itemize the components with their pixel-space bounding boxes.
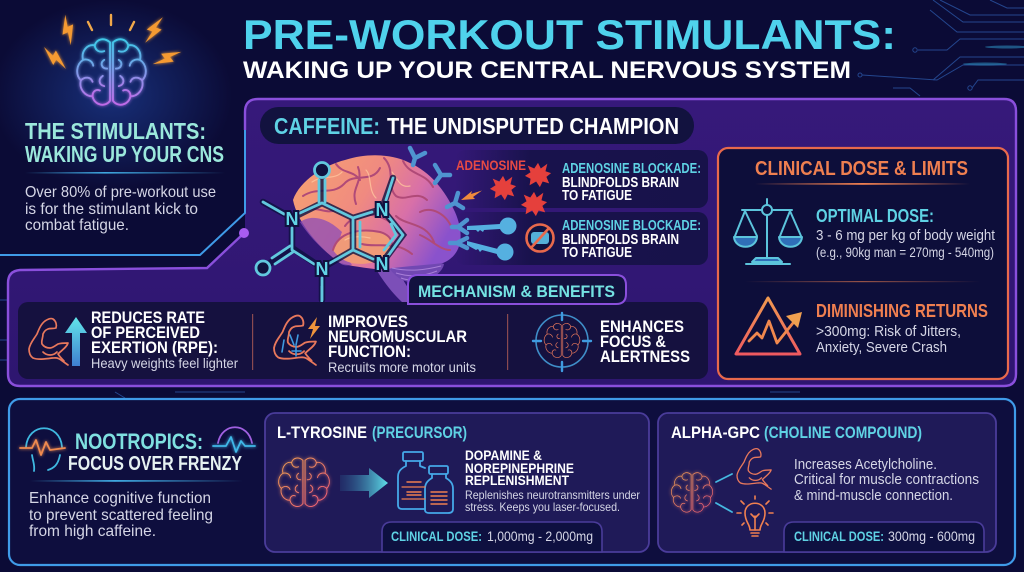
illustration: receptors <box>410 148 467 248</box>
benefit: neuromuscular: Recruits more motor units <box>328 359 476 375</box>
text: adenosine blockade two: BLINDFOLDS BRAIN <box>562 232 679 248</box>
icon: balance scale <box>734 199 802 264</box>
benefit: reduces RPE <box>29 309 238 371</box>
caffeine heading pill: CAFFEINE: <box>274 113 380 139</box>
text: optimal dose <box>816 206 995 260</box>
text: adenosine blockade two <box>562 218 701 261</box>
icon: supplement bottles <box>398 452 453 513</box>
illustration: keys <box>467 218 516 260</box>
connector lines <box>716 474 732 512</box>
nootropics text: FOCUS OVER FRENZY <box>68 453 243 475</box>
benefit: neuromuscular <box>274 313 476 375</box>
molecule stem over benefit panel <box>320 286 323 302</box>
benefit: reduces RPE: OF PERCEIVED <box>91 324 200 342</box>
benefit: reduces RPE: REDUCES RATE <box>91 309 205 327</box>
icon: pulse arc <box>213 427 255 452</box>
benefit: focus: FOCUS & <box>600 333 666 351</box>
illustration: caffeine molecule: N <box>376 254 388 274</box>
adenosine label: ADENOSINE <box>456 158 526 173</box>
illustration: caffeine molecule: N <box>316 259 328 279</box>
card: L-Tyrosine <box>265 413 649 552</box>
left intro block: WAKING UP YOUR CNS <box>25 141 224 167</box>
illustration: caffeine molecule <box>256 162 403 300</box>
clinical dose pill <box>382 522 602 552</box>
title <box>243 11 896 84</box>
benefit: focus <box>533 313 690 371</box>
text: dopamine: REPLENISHMENT <box>465 472 569 488</box>
circuit glow streaks <box>963 46 1024 66</box>
card: Alpha-GPC: (CHOLINE COMPOUND) <box>764 423 922 442</box>
panel: nootropics <box>9 399 1015 565</box>
text: acetylcholine: & mind-muscle connection. <box>794 487 953 504</box>
left intro block <box>25 118 225 234</box>
nootropics text: Enhance cognitive function <box>29 490 211 507</box>
text: diminishing returns: >300mg: Risk of Jitters, <box>816 323 961 340</box>
title: PRE-WORKOUT STIMULANTS: <box>243 11 896 58</box>
card: L-Tyrosine: L-TYROSINE <box>277 423 367 442</box>
icon: warning triangle with rising arrow <box>736 298 802 354</box>
text: dopamine: stress. Keeps you laser-focused. <box>465 500 620 514</box>
left intro block: is for the stimulant kick to <box>25 201 198 218</box>
text: diminishing returns <box>816 301 988 356</box>
card: Alpha-GPC <box>658 413 996 552</box>
card: L-Tyrosine: (PRECURSOR) <box>372 423 467 442</box>
text: dopamine: Replenishes neurotransmitters under <box>465 488 640 502</box>
nootropics text: from high caffeine. <box>29 523 156 540</box>
arrow: brain to supplement <box>340 468 388 498</box>
text: optimal dose: (e.g., 90kg man = 270mg - 540mg) <box>816 245 994 260</box>
benefit: neuromuscular: FUNCTION: <box>328 343 411 361</box>
text: dopamine: NOREPINEPHRINE <box>465 460 574 476</box>
icon: blocked symbol <box>526 224 554 252</box>
benefit: neuromuscular: IMPROVES <box>328 313 408 331</box>
adenosine molecules <box>490 163 551 216</box>
benefit: focus: ALERTNESS <box>600 348 690 366</box>
icon: glowing brain with lightning bolts <box>39 13 183 105</box>
text: adenosine blockade one: ADENOSINE BLOCKADE: <box>562 161 701 177</box>
left intro block: combat fatigue. <box>25 217 129 234</box>
panel: clinical dose and limits <box>718 148 1008 379</box>
text: adenosine blockade two: ADENOSINE BLOCKADE: <box>562 218 701 234</box>
icon: head with pulse <box>20 428 65 471</box>
illustration: caffeine molecule: N <box>286 209 298 229</box>
nootropics text: to prevent scattered feeling <box>29 507 213 524</box>
clinical dose pill two: CLINICAL DOSE: <box>794 528 884 544</box>
panel: caffeine <box>0 99 1016 386</box>
blockade row backgrounds <box>455 150 708 265</box>
left intro block: Over 80% of pre-workout use <box>25 184 216 201</box>
text: dopamine <box>465 447 640 514</box>
nootropics text <box>29 429 243 540</box>
clinical dose pill: 1,000mg - 2,000mg <box>487 528 593 544</box>
text: acetylcholine <box>794 456 979 504</box>
benefit: focus: ENHANCES <box>600 318 684 336</box>
panel: mechanism and benefits <box>18 302 708 379</box>
icon: neon brain <box>279 458 329 507</box>
text: acetylcholine: Critical for muscle contractions <box>794 471 979 488</box>
clinical dose pill two <box>784 522 984 552</box>
text: diminishing returns: Anxiety, Severe Crash <box>816 339 947 356</box>
text: optimal dose: OPTIMAL DOSE: <box>816 206 934 226</box>
circuit background top right <box>0 0 1024 398</box>
mechanism label <box>408 275 626 304</box>
caffeine heading pill <box>260 107 694 144</box>
benefit: neuromuscular: NEUROMUSCULAR <box>328 328 467 346</box>
icon: light bulb <box>737 496 773 536</box>
text: adenosine blockade one <box>562 161 701 204</box>
title: WAKING UP YOUR CENTRAL NERVOUS SYSTEM <box>243 57 851 84</box>
card: Alpha-GPC: ALPHA-GPC <box>671 423 760 442</box>
icon: neon brain small <box>671 473 713 512</box>
text: adenosine blockade two: TO FATIGUE <box>562 245 632 261</box>
arrow: adenosine to receptor <box>461 190 482 200</box>
background glow behind brain <box>0 0 232 190</box>
text: dopamine: DOPAMINE & <box>465 447 542 463</box>
text: acetylcholine: Increases Acetylcholine. <box>794 456 937 473</box>
text: adenosine blockade one: TO FATIGUE <box>562 188 632 204</box>
illustration: caffeine molecule: N <box>376 200 388 220</box>
text: adenosine blockade one: BLINDFOLDS BRAIN <box>562 175 679 191</box>
text: optimal dose: 3 - 6 mg per kg of body weight <box>816 228 995 244</box>
panel: clinical dose and limits: CLINICAL DOSE & LIMITS <box>755 158 968 180</box>
benefit: reduces RPE: Heavy weights feel lighter <box>91 355 238 371</box>
text: diminishing returns: DIMINISHING RETURNS <box>816 301 988 321</box>
mechanism label: MECHANISM & BENEFITS <box>418 282 615 301</box>
clinical dose pill two: 300mg - 600mg <box>888 528 975 544</box>
icon: flexed arm <box>737 449 771 489</box>
clinical dose pill: CLINICAL DOSE: <box>391 528 482 544</box>
illustration: brain <box>293 155 461 302</box>
benefit: reduces RPE: EXERTION (RPE): <box>91 339 218 357</box>
left intro block: THE STIMULANTS: <box>25 118 206 144</box>
nootropics text: NOOTROPICS: <box>75 429 203 454</box>
caffeine heading pill: THE UNDISPUTED CHAMPION <box>387 113 679 139</box>
